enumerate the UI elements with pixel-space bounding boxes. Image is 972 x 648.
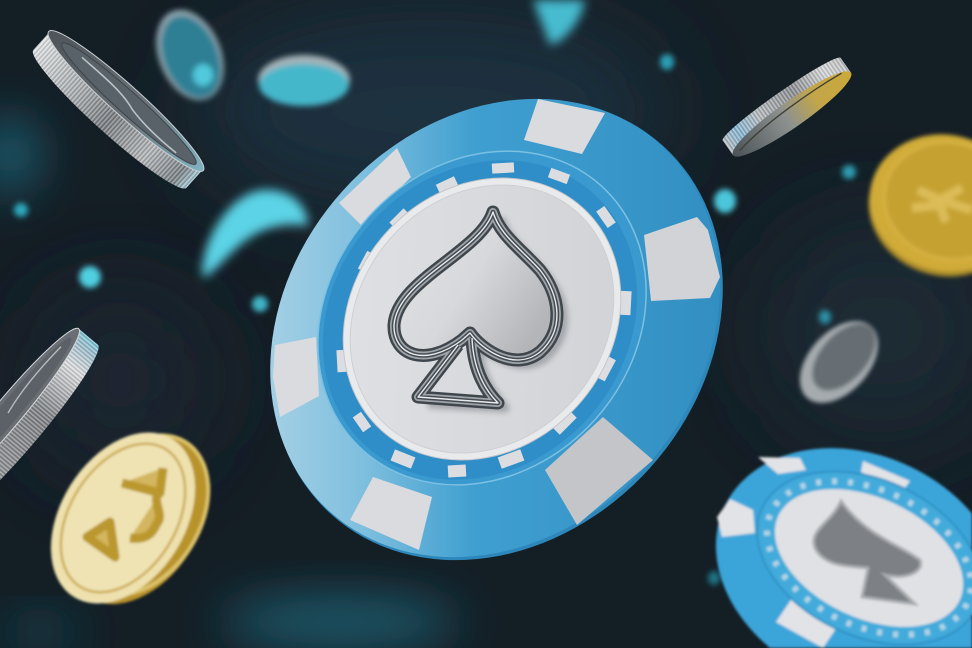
symbol on gold coin bbox=[912, 188, 972, 222]
chip edge bbox=[178, 8, 816, 648]
chip: main spade chip bbox=[177, 7, 816, 648]
coin: silver top-right bbox=[719, 52, 858, 166]
icon: chrome spade bbox=[394, 212, 563, 408]
coin: blurred teal flat bbox=[258, 55, 350, 106]
coin: silver top-left bbox=[23, 20, 213, 199]
inner disc bbox=[286, 121, 678, 517]
coin: blurred teal top bbox=[144, 0, 236, 110]
inner groove bbox=[250, 84, 714, 552]
white edge blocks bbox=[273, 99, 720, 550]
coin: gold bottom-left bbox=[21, 406, 238, 631]
coin: blurred silver right bbox=[785, 306, 893, 418]
small groove dashes bbox=[336, 162, 632, 477]
coin: silver left bbox=[0, 320, 109, 522]
chip face bbox=[177, 7, 813, 648]
chip: small blurred bottom-right bbox=[716, 437, 972, 648]
symbol on gold coin bbox=[87, 468, 163, 557]
coin: gold right bbox=[853, 117, 972, 294]
glowing teal particles bbox=[14, 0, 856, 585]
